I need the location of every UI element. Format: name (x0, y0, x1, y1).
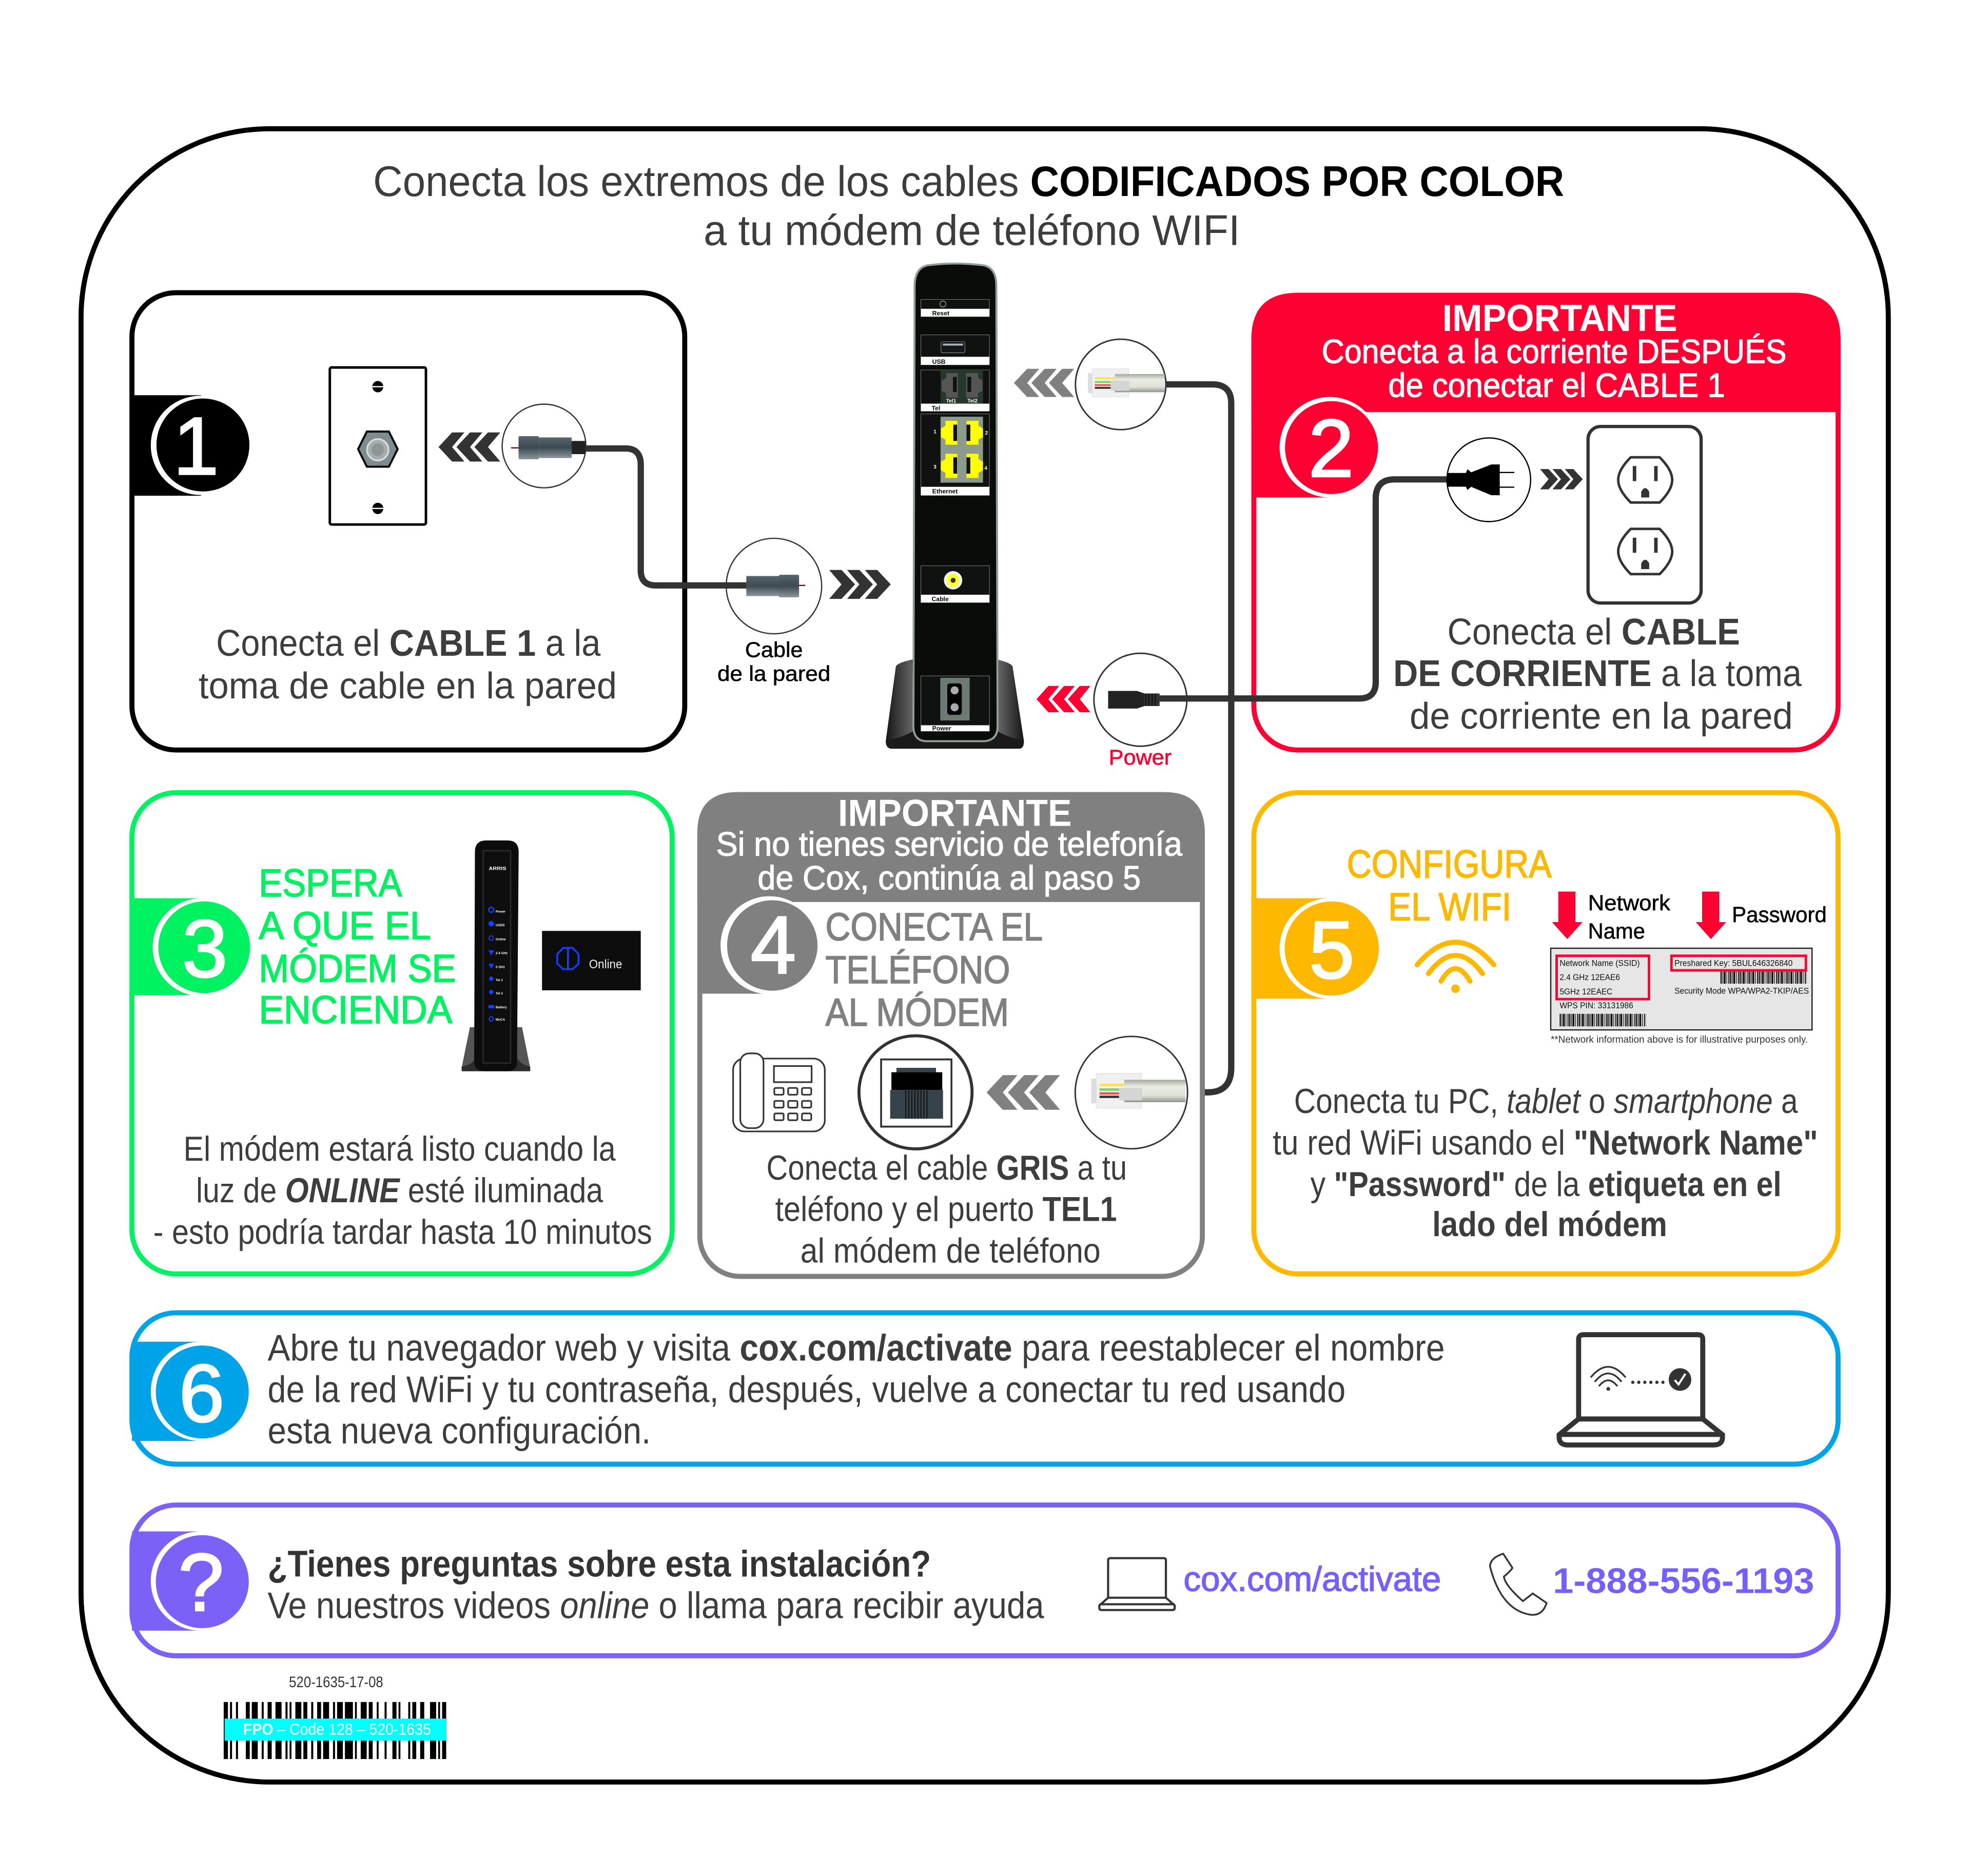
arrow: toward Tel port (1014, 369, 1074, 397)
note: illustrative: **Network information above is for illustrative purposes only. (1551, 1034, 1808, 1045)
port: Cable: Cable (931, 596, 949, 603)
callout: coax connector at wall (502, 404, 586, 488)
label: cable de la pared (717, 637, 830, 686)
text: step 4 instruction: teléfono y el puerto TEL1 (775, 1190, 1117, 1229)
header: importante: de conectar el CABLE 1 (1388, 367, 1725, 405)
text: step 5 instruction: lado del módem (1432, 1205, 1667, 1244)
panel: step 3 (132, 793, 672, 1274)
text: step 6 instruction: de la red WiFi y tu contraseña, después, vuelve a conectar tu red usando (268, 1369, 1345, 1410)
badge: number 4 (700, 896, 818, 994)
arrow: toward modem cable port (829, 570, 891, 599)
header: importante: de Cox, continúa al paso 5 (757, 859, 1141, 897)
modem: front view with LEDs: MoCA (496, 1018, 505, 1022)
callout: phone plug at modem (1076, 339, 1166, 429)
modem: front view with LEDs: 2.4 GHz (496, 951, 508, 955)
label: network name: Name (1588, 919, 1645, 944)
modem: front view with LEDs: Online (496, 938, 506, 942)
panel: step 4 (697, 792, 1205, 1276)
panel: questions (132, 1505, 1838, 1656)
header: importante: IMPORTANTE (1442, 297, 1677, 339)
text: step 3 instruction: El módem estará listo cuando la (184, 1130, 616, 1168)
label: cable de la pared: de la pared (717, 661, 830, 686)
modem label sticker: WPS PIN: 33131986 (1559, 1001, 1633, 1010)
port: Tel: Tel2 (967, 399, 978, 404)
arrow: toward wall plate (439, 433, 500, 461)
title: CODIFICADOS POR COLOR (1030, 158, 1564, 205)
modem: front view with LEDs: Battery (496, 1006, 507, 1009)
header: importante: Conecta a la corriente DESPUÉS (1322, 333, 1786, 371)
heading: conecta el teléfono: AL MÓDEM (826, 991, 1009, 1034)
heading: espera: ENCIENDA (259, 988, 453, 1032)
text: step 2 instruction: DE CORRIENTE a la toma (1393, 653, 1802, 694)
text: step 1 instruction: Conecta el CABLE 1 a la (216, 623, 601, 664)
title: Conecta los extremos de los cables (373, 158, 1019, 205)
modem label sticker: 2.4 GHz 12EAE6 (1559, 972, 1620, 982)
icon: online LED: Online (589, 957, 622, 971)
heading: espera: MÓDEM SE (259, 947, 456, 990)
badge: number 1: 1 (173, 400, 219, 492)
port: Tel (921, 370, 989, 412)
port: Ethernet: 4 (984, 466, 987, 472)
modem: front view with LEDs: Tel 1 (496, 979, 503, 982)
icon: telephone (733, 1053, 825, 1131)
icon: laptop with wifi check (1559, 1335, 1723, 1445)
label: cable de la pared: Cable (745, 637, 803, 661)
panel: step 1 (132, 292, 685, 750)
icon: phone handset (1490, 1554, 1547, 1615)
heading: espera: A QUE EL (259, 904, 431, 948)
modem: front view with LEDs: Power (496, 910, 506, 914)
modem label sticker: Security Mode WPA/WPA2-TKIP/AES (1674, 986, 1809, 996)
callout: coax connector at modem (726, 538, 822, 634)
barcode (224, 1702, 446, 1759)
text: step 2 instruction: de corriente en la pared (1410, 696, 1793, 737)
arrow: network name (1552, 892, 1583, 939)
modem: rear view (886, 264, 1024, 749)
text: step 6 instruction: esta nueva configuración. (268, 1411, 651, 1452)
text: step 4 instruction: al módem de teléfono (801, 1232, 1101, 1271)
callout: power connector (1094, 653, 1187, 746)
heading: conecta el teléfono: CONECTA EL (826, 906, 1043, 949)
text: step 2 instruction (1393, 612, 1802, 737)
cable: coax wall to modem (578, 448, 742, 585)
text: step 6 instruction (268, 1327, 1445, 1452)
arrow: password (1695, 892, 1726, 939)
port: Ethernet: 3 (933, 464, 937, 470)
header: importante (697, 792, 1205, 902)
text: questions (268, 1544, 1044, 1626)
badge: number 5 (1254, 898, 1380, 999)
arrow: toward power port (1037, 686, 1090, 712)
modem: front view with LEDs: 5 GHz (496, 965, 505, 969)
logo: arris: ARRIS (489, 866, 506, 871)
header: importante (1252, 292, 1841, 412)
port: reset (921, 300, 989, 317)
modem: front view with LEDs: USDS (496, 924, 505, 927)
label: password: Password (1732, 903, 1827, 927)
modem body (913, 264, 998, 741)
text: step 5 instruction: Conecta tu PC, tablet o smartphone a (1294, 1082, 1798, 1121)
LED column (489, 907, 494, 1021)
text: step 4 instruction: Conecta el cable GRIS a tu (767, 1149, 1127, 1187)
text: step 3 instruction (153, 1130, 652, 1252)
icon: phone jack (859, 1036, 972, 1149)
text: step 5 instruction: y "Password" de la etiqueta en el (1311, 1165, 1782, 1204)
text: step 3 instruction: - esto podría tardar hasta 10 minutos (153, 1213, 652, 1252)
panel: step 5 (1254, 793, 1838, 1274)
modem label sticker (1551, 948, 1812, 1030)
panel: step 6 (132, 1313, 1838, 1464)
modem: front view with LEDs (462, 841, 530, 1071)
heading: configura el wifi: EL WIFI (1388, 885, 1511, 929)
port: Ethernet: 1 (933, 429, 937, 435)
panel: step 2 (1252, 292, 1841, 750)
port: Ethernet: Ethernet (932, 487, 958, 495)
port: Tel: Tel (931, 404, 940, 412)
port: USB: USB (932, 358, 946, 365)
phone number: 1-888-556-1193 (1553, 1560, 1814, 1600)
label: network name (1588, 891, 1670, 944)
port: Ethernet: 2 (985, 431, 988, 436)
badge: number 6: 6 (179, 1347, 224, 1439)
port: Tel: Tel1 (946, 399, 957, 404)
badge: question mark: ? (179, 1537, 224, 1628)
text: step 2 instruction: Conecta el CABLE (1447, 612, 1740, 653)
title (373, 158, 1564, 254)
badge: number 1 (132, 395, 250, 496)
badge: number 4: 4 (751, 899, 796, 990)
badge: number 3: 3 (182, 903, 227, 994)
badge: number 5: 5 (1309, 904, 1354, 995)
callout: phone plug (1075, 1037, 1187, 1149)
text: step 5 instruction: tu red WiFi usando el "Network Name" (1273, 1124, 1818, 1162)
text: step 6 instruction: Abre tu navegador web y visita cox.com/activate para reestablecer el nombre (268, 1327, 1445, 1369)
icon: laptop (1099, 1558, 1175, 1610)
port: Power: Power (932, 725, 951, 732)
modem stand (886, 659, 1024, 749)
header: importante: IMPORTANTE (838, 792, 1071, 834)
icon: online LED (542, 931, 641, 990)
badge: number 2 (1254, 397, 1380, 498)
arrow: toward phone jack (987, 1075, 1060, 1110)
icon: wall outlet (1588, 426, 1701, 603)
modem: front view with LEDs: Tel 2 (496, 992, 503, 995)
modem label sticker: Preshared Key: 5BUL646326840 (1674, 959, 1792, 968)
text: step 4 instruction (767, 1149, 1127, 1271)
badge: number 3 (132, 898, 250, 996)
text: step 1 instruction (199, 623, 617, 707)
link: cox.com/activate: cox.com/activate (1183, 1560, 1441, 1599)
icon: wifi (1417, 942, 1494, 990)
callout: wall plug (1447, 438, 1531, 522)
heading: configura el wifi (1347, 843, 1552, 929)
barcode: FPO – Code 128 – 520-1635 (243, 1719, 431, 1738)
heading: conecta el teléfono: TELÉFONO (826, 948, 1010, 992)
port: reset: Reset (932, 310, 949, 317)
heading: conecta el teléfono (826, 906, 1043, 1034)
port: USB (921, 335, 989, 365)
text: step 5 instruction (1273, 1082, 1818, 1244)
port: Power (921, 676, 989, 732)
text: step 3 instruction: luz de ONLINE esté iluminada (196, 1171, 603, 1210)
modem label sticker: Network Name (SSID) (1559, 959, 1640, 968)
title: a tu módem de teléfono WIFI (704, 206, 1240, 254)
modem label sticker: 5GHz 12EAEC (1559, 987, 1612, 996)
cable: power cord (1149, 479, 1464, 698)
text: step 1 instruction: toma de cable en la pared (199, 666, 617, 707)
code: print job number: 520-1635-17-08 (289, 1674, 383, 1691)
header: importante: Si no tienes servicio de telefonía (716, 825, 1182, 863)
badge: number 2: 2 (1309, 403, 1354, 494)
port: Ethernet (921, 414, 989, 495)
label: network name: Network (1588, 891, 1670, 915)
heading: espera (259, 862, 456, 1032)
label: power: Power (1109, 745, 1172, 769)
icon: wall cable plate (330, 367, 426, 524)
cable: gray phone cable (1166, 384, 1231, 1092)
heading: configura el wifi: CONFIGURA (1347, 843, 1552, 886)
badge: number 6 (132, 1342, 250, 1441)
text: questions: Ve nuestros videos online o llama para recibir ayuda (268, 1585, 1044, 1626)
port: Cable (921, 566, 989, 603)
badge: question mark (132, 1531, 250, 1631)
arrow: toward outlet (1540, 469, 1583, 490)
heading: espera: ESPERA (259, 862, 402, 905)
text: questions: ¿Tienes preguntas sobre esta instalación? (268, 1544, 931, 1585)
